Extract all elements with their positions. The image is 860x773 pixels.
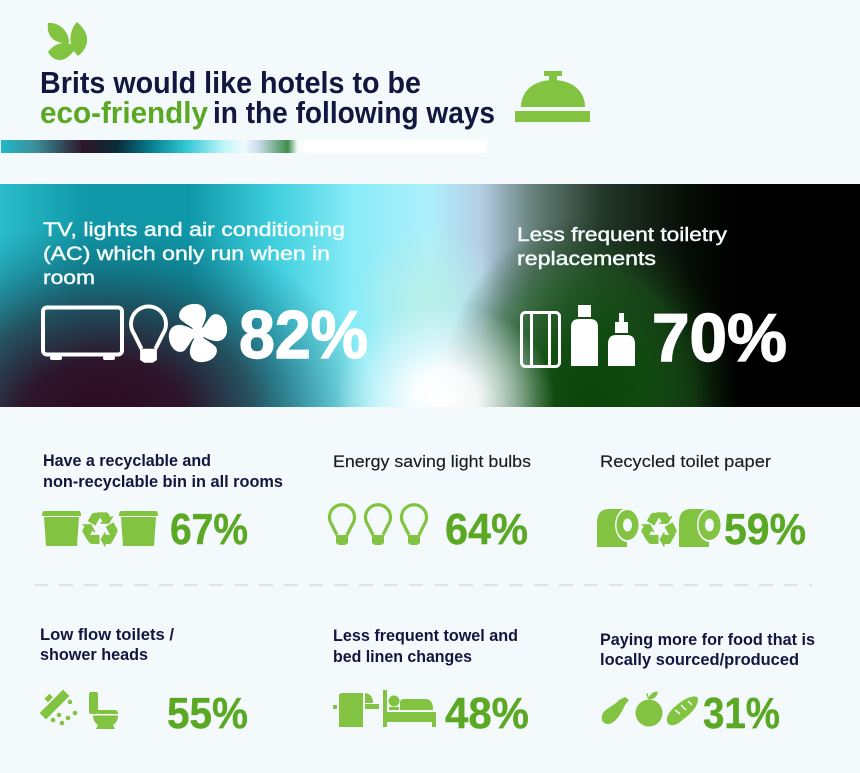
text: less frequent toiletry: replacements xyxy=(517,248,656,270)
text: TV, lights and AC: room xyxy=(43,267,95,289)
text: less frequent toiletry xyxy=(517,224,727,270)
stat: 64%: 64% xyxy=(445,505,528,554)
label: locally sourced/produced xyxy=(600,650,799,669)
icon: fan xyxy=(169,304,227,362)
label xyxy=(40,625,174,664)
label: Recycled toilet paper xyxy=(600,452,771,471)
label: Low flow toilets / xyxy=(40,625,174,644)
icon: bin xyxy=(42,511,81,546)
panel: gradient banner xyxy=(0,184,860,407)
item: less frequent towel changes xyxy=(333,626,529,738)
stat: 48%: 48% xyxy=(445,689,529,738)
gradient strip xyxy=(1,140,487,153)
text: TV, lights and AC xyxy=(43,219,345,289)
item: recycling bins xyxy=(42,451,283,558)
icon: courgette xyxy=(602,697,629,724)
icon: light bulb xyxy=(131,306,166,363)
logo: leaves xyxy=(48,22,87,60)
item: energy saving bulbs xyxy=(330,452,531,554)
text: TV, lights and AC: (AC) which only run when in xyxy=(43,243,330,265)
stat: 82%: 82% xyxy=(239,297,368,373)
title: Brits would like hotels to be xyxy=(40,65,421,100)
stat: 70%: 70% xyxy=(652,300,787,376)
title: in the following ways xyxy=(213,95,495,130)
icon: bed xyxy=(383,690,436,727)
icon: recycle: ♻ xyxy=(79,503,121,558)
icons: three bulbs xyxy=(330,505,426,545)
item: locally sourced food xyxy=(600,630,815,738)
stat: 31%: 31% xyxy=(703,689,780,738)
icon: second bin xyxy=(119,511,158,546)
icon: towel rail xyxy=(333,693,379,727)
icon: second toilet roll xyxy=(679,508,722,547)
icon: toilet roll xyxy=(597,508,640,547)
label: Energy saving light bulbs xyxy=(333,452,531,471)
label: shower heads xyxy=(40,645,148,664)
item: recycled toilet paper xyxy=(597,452,806,558)
label: Less frequent towel and xyxy=(333,626,518,645)
label xyxy=(333,626,518,666)
stat: 55%: 55% xyxy=(167,689,248,738)
label: Have a recyclable and xyxy=(43,451,211,470)
icon: towels xyxy=(522,312,560,366)
label: non-recyclable bin in all rooms xyxy=(43,472,283,491)
icon: reception bell xyxy=(515,71,590,122)
icon: pump bottle xyxy=(608,313,635,366)
title xyxy=(40,65,495,130)
icon: television xyxy=(43,308,122,360)
icon: apple xyxy=(636,692,662,726)
label xyxy=(43,451,283,491)
icon: toilet xyxy=(89,692,118,729)
stat: 59%: 59% xyxy=(724,505,806,554)
icon: baguette xyxy=(667,696,698,725)
item: low flow toilets xyxy=(40,625,248,738)
text: TV, lights and AC: TV, lights and air conditioning xyxy=(43,219,345,241)
stat: 67%: 67% xyxy=(170,505,248,554)
text: less frequent toiletry: Less frequent toiletry xyxy=(517,224,727,246)
icon: shower head xyxy=(40,690,77,725)
label: Paying more for food that is xyxy=(600,630,815,649)
label: bed linen changes xyxy=(333,647,472,666)
title: eco-friendly xyxy=(40,95,209,130)
icon: bottle xyxy=(571,305,598,366)
icon: recycle: ♻ xyxy=(638,503,680,558)
label xyxy=(600,630,815,669)
